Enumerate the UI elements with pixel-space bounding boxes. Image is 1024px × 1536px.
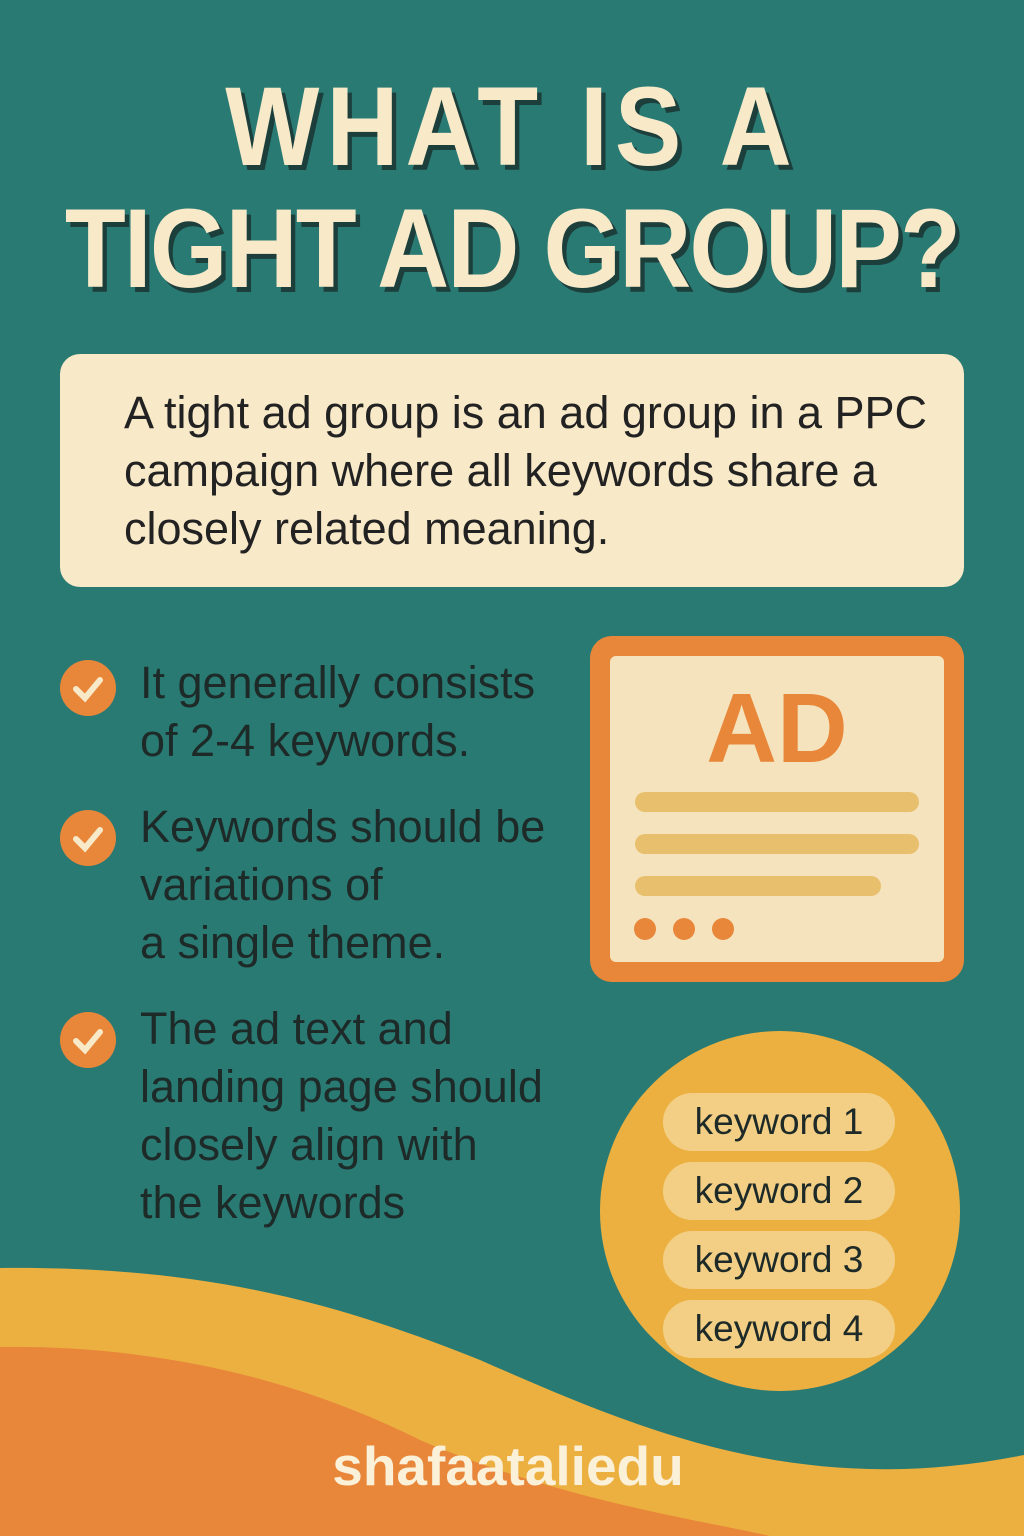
title: TIGHT AD GROUP? bbox=[65, 186, 959, 311]
keyword circle: keyword 3 bbox=[695, 1239, 863, 1280]
bullet 1 bbox=[60, 657, 535, 766]
icon: ad card bbox=[590, 636, 964, 982]
title bbox=[65, 64, 960, 311]
bullet 3: landing page should bbox=[140, 1061, 543, 1112]
bullet 2 bbox=[60, 801, 545, 968]
bullet 2: Keywords should be bbox=[140, 801, 545, 852]
keyword circle bbox=[600, 1031, 960, 1391]
bullet 3: closely align with bbox=[140, 1119, 478, 1170]
keyword circle: keyword 4 bbox=[695, 1308, 863, 1349]
bullet 2: variations of bbox=[140, 859, 383, 910]
keyword circle: keyword 1 bbox=[695, 1101, 863, 1142]
definition box: closely related meaning. bbox=[124, 503, 609, 554]
bullet 2: a single theme. bbox=[140, 917, 445, 968]
icon: ad card: AD bbox=[706, 673, 848, 783]
footer brand: shafaataliedu bbox=[332, 1435, 684, 1497]
bullet 3 bbox=[60, 1003, 543, 1228]
bullet 3: the keywords bbox=[140, 1177, 405, 1228]
title: WHAT IS A bbox=[225, 64, 799, 189]
keyword circle: keyword 2 bbox=[695, 1170, 863, 1211]
definition box: A tight ad group is an ad group in a PPC bbox=[124, 387, 927, 438]
definition box: campaign where all keywords share a bbox=[124, 445, 877, 496]
bullet 1: It generally consists bbox=[140, 657, 535, 708]
bullet 1: of 2-4 keywords. bbox=[140, 715, 470, 766]
definition box bbox=[60, 354, 964, 587]
bullet 3: The ad text and bbox=[140, 1003, 453, 1054]
